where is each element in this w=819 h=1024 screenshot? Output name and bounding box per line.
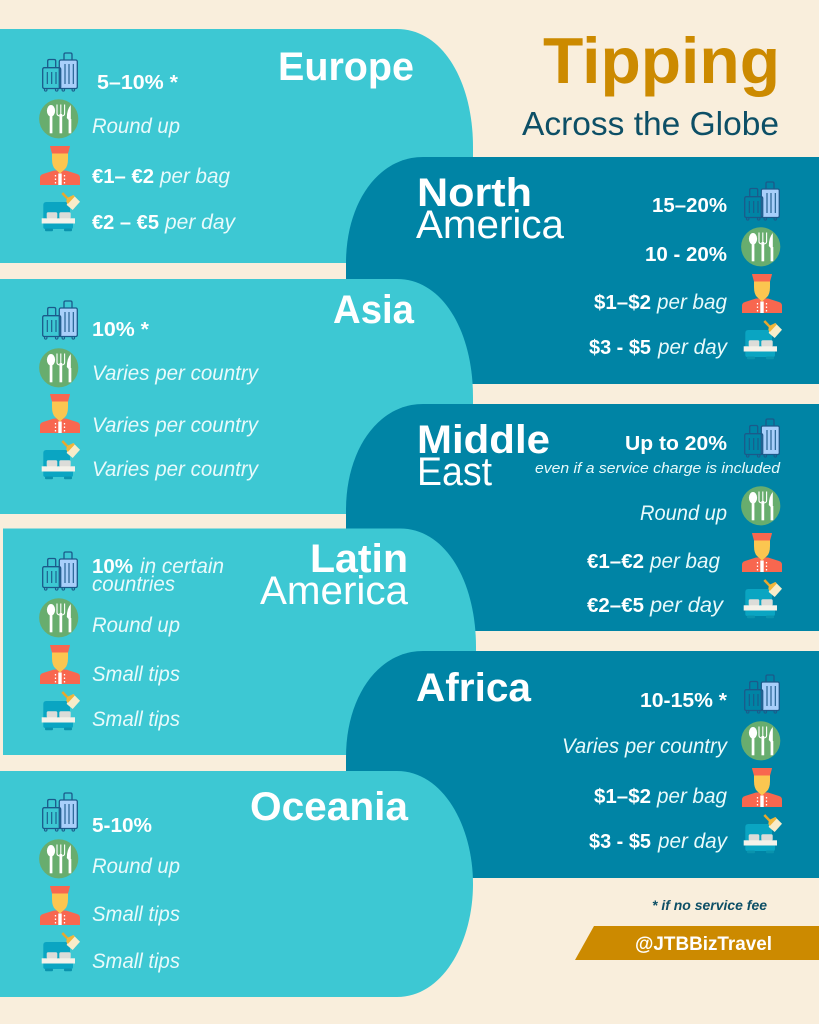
North America hotel tip: 15–20% [652,195,727,217]
Africa housekeeping tip: $3 - $5 [589,831,651,853]
title: Across the Globe [522,105,779,142]
Asia restaurant tip: Varies per country [92,362,259,385]
Latin America hotel tip: countries [92,573,175,596]
footnote: * if no service fee [652,897,767,913]
heading: Oceania: Oceania [250,785,409,829]
icon: restaurant [39,348,78,387]
title [522,24,780,142]
North America housekeeping tip: per day [657,336,728,359]
icon: luggage [745,419,779,457]
Africa restaurant tip: Varies per country [562,735,728,758]
panel: Latin America [3,528,476,755]
Middle East housekeeping tip [587,594,725,617]
icon: bellhop [742,768,782,807]
banner: handle: @JTBBizTravel [635,934,772,955]
Europe restaurant tip: Round up [92,115,180,138]
icon: housekeeping [42,692,80,730]
North America bellhop tip: per bag [656,291,727,314]
Middle East bellhop tip: per bag [649,550,720,573]
banner: handle [575,926,819,960]
panel: Africa [346,651,819,878]
Oceania hotel tip: 5-10% [92,815,152,837]
Middle East housekeeping tip: €2–€5 [587,595,644,617]
icon: bellhop [40,146,80,185]
icon: bellhop [742,533,782,572]
title: Tipping [543,24,780,97]
icon: housekeeping [42,193,80,231]
panel: Europe [0,29,473,263]
icon: luggage [43,53,77,91]
Asia housekeeping tip: Varies per country [92,458,259,481]
Latin America restaurant tip: Round up [92,614,180,637]
Africa bellhop tip: per bag [656,785,727,808]
icon: restaurant [39,598,78,637]
Africa housekeeping tip: per day [657,830,728,853]
North America rows [589,182,782,359]
North America bellhop tip [594,291,727,314]
icon: housekeeping [42,933,80,971]
icon: housekeeping [744,321,782,359]
Middle East hotel tip: Up to 20% [625,433,727,455]
heading: Latin America: Latin [310,537,408,581]
icon: housekeeping [744,815,782,853]
panel: Asia [0,279,473,514]
Europe housekeeping tip [92,211,236,234]
heading: Middle East: Middle [417,418,550,462]
Middle East housekeeping tip: per day [649,594,725,617]
Middle East bellhop tip [587,550,720,573]
Europe rows [39,53,236,234]
icon: restaurant [39,839,78,878]
Latin America hotel tip: 10% [92,556,133,578]
panel: Oceania [0,771,473,997]
icon: housekeeping [42,441,80,479]
icon: restaurant [741,721,780,760]
heading: Asia: Asia [333,288,415,332]
icon: luggage [745,675,779,713]
panel: Middle East [346,404,819,631]
heading: North America [416,171,565,247]
Latin America bellhop tip: Small tips [92,663,180,686]
Africa hotel tip: 10-15% * [640,690,727,712]
Europe housekeeping tip: per day [164,211,236,234]
Asia hotel tip: 10% * [92,319,149,341]
icon: bellhop [40,645,80,684]
panel: North America [346,157,819,384]
Latin America housekeeping tip: Small tips [92,708,180,731]
Asia bellhop tip: Varies per country [92,414,259,437]
icon: restaurant [741,227,780,266]
Middle East bellhop tip: €1–€2 [587,551,644,573]
Middle East restaurant tip: Round up [640,502,727,525]
Africa housekeeping tip [589,830,728,853]
icon: restaurant [741,486,780,525]
icon: bellhop [40,886,80,925]
heading: North America: North [417,171,532,215]
icon: housekeeping [744,580,782,618]
Africa bellhop tip: $1–$2 [594,786,651,808]
heading: Latin America: America [260,569,409,613]
Oceania restaurant tip: Round up [92,855,180,878]
icon: bellhop [742,274,782,313]
heading: Middle East [417,418,550,494]
heading: Latin America [260,537,409,613]
Asia rows [39,301,259,481]
Latin America rows [39,552,224,731]
icon: luggage [43,301,77,339]
icon: luggage [43,552,77,590]
icon: bellhop [40,394,80,433]
heading: Europe: Europe [278,45,414,89]
heading: Africa: Africa [416,666,532,710]
Oceania housekeeping tip: Small tips [92,950,180,973]
icon: restaurant [39,99,78,138]
North America housekeeping tip: $3 - $5 [589,337,651,359]
Oceania rows [39,793,180,973]
heading: Middle East: East [417,450,492,494]
Latin America hotel tip: in certain [140,555,224,578]
heading: North America: America [416,203,565,247]
Europe bellhop tip [92,165,230,188]
icon: luggage [43,793,77,831]
Latin America hotel tip [92,555,224,596]
Africa rows [562,675,782,853]
Europe bellhop tip: per bag [159,165,230,188]
Middle East rows [535,419,782,618]
Middle East hotel tip [535,433,781,477]
North America restaurant tip: 10 - 20% [645,244,727,266]
Europe hotel tip: 5–10% * [97,72,178,94]
North America housekeeping tip [589,336,728,359]
icon: luggage [745,182,779,220]
Middle East hotel tip: even if a service charge is included [535,460,781,477]
Oceania bellhop tip: Small tips [92,903,180,926]
Africa bellhop tip [594,785,727,808]
North America bellhop tip: $1–$2 [594,292,651,314]
Europe bellhop tip: €1– €2 [92,166,154,188]
Europe housekeeping tip: €2 – €5 [92,212,159,234]
